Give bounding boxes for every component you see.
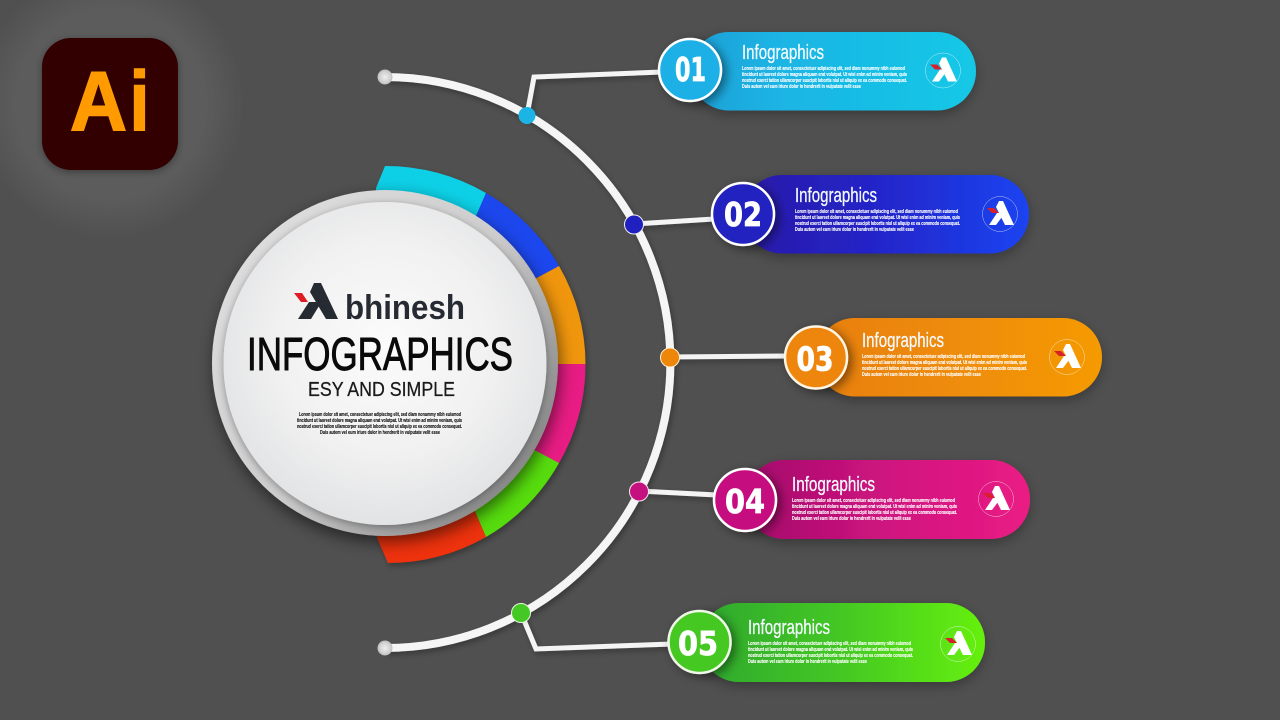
- heading: INFOGRAPHICS: [247, 328, 513, 380]
- icon: Adobe Illustrator logo: i: [130, 54, 150, 148]
- number badge: [659, 39, 721, 101]
- pill: [745, 460, 1030, 539]
- background glow behind logo: [0, 0, 245, 239]
- title: Infographics: [792, 474, 875, 496]
- body text: tincidunt ut laoreet dolore magna aliquam erat volutpat. Ut wisi enim ad minim veniam, quis: [792, 504, 957, 510]
- body text: Duis autem vel eum iriure dolor in hendrerit in vulputate velit esse: [742, 84, 861, 90]
- body text: Duis autem vel eum iriure dolor in hendrerit in vulputate velit esse: [862, 372, 981, 378]
- body text: Duis autem vel eum iriure dolor in hendrerit in vulputate velit esse: [792, 516, 911, 522]
- arc dot 5: [512, 604, 530, 622]
- body text: Duis autem vel eum iriure dolor in hendrerit in vulputate velit esse: [795, 227, 914, 233]
- center text block: Lorem ipsum dolor sit amet, consectetuer adipiscing elit, sed diam nonummy nibh euismod: [299, 412, 461, 418]
- pill: [743, 175, 1029, 254]
- body text: nostrud exerci tation ullamcorper suscipit lobortis nisl ut aliquip ex ea commodo consequat.: [862, 366, 1027, 372]
- logo icon: [1050, 340, 1084, 374]
- number: 05: [678, 624, 718, 663]
- large arc: [385, 77, 670, 648]
- body text: Lorem ipsum dolor sit amet, consectetuer adipiscing elit, sed diam nonummy nibh euismod: [795, 209, 958, 215]
- body text: Lorem ipsum dolor sit amet, consectetuer adipiscing elit, sed diam nonummy nibh euismod: [742, 66, 905, 72]
- pill: [700, 603, 985, 682]
- title: Infographics: [742, 42, 824, 64]
- body text: [792, 498, 957, 522]
- arc dot 4: [630, 482, 648, 501]
- subheading: ESY AND SIMPLE: [308, 379, 455, 401]
- title: Infographics: [862, 330, 944, 352]
- logo icon: [940, 626, 976, 662]
- card 01: [659, 32, 976, 110]
- center text block: nostrud exerci tation ullamcorper suscipit lobortis nisl ut aliquip ex ea commodo consequat.: [297, 424, 462, 430]
- arc dot 3: [660, 348, 680, 367]
- card 02: [712, 175, 1029, 254]
- number badge: [785, 326, 847, 388]
- ring segment: blue: [440, 193, 559, 330]
- body text: nostrud exerci tation ullamcorper suscipit lobortis nisl ut aliquip ex ea commodo consequat.: [742, 78, 907, 84]
- logo icon: [978, 482, 1014, 516]
- icon: Adobe Illustrator logo: [42, 38, 178, 170]
- brand logo: Abhinesh: [294, 283, 465, 327]
- number: 04: [725, 482, 765, 521]
- logo icon: [926, 53, 960, 88]
- colored segmented ring: [376, 166, 586, 563]
- center text block: tincidunt ut laoreet dolore magna aliquam erat volutpat. Ut wisi enim ad minim veniam, quis: [297, 418, 462, 424]
- arc end cap: top: [378, 70, 392, 84]
- ring segment: red: [377, 430, 486, 563]
- body text: [795, 209, 960, 233]
- body text: nostrud exerci tation ullamcorper suscipit lobortis nisl ut aliquip ex ea commodo consequat.: [795, 221, 960, 227]
- body text: Lorem ipsum dolor sit amet, consectetuer adipiscing elit, sed diam nonummy nibh euismod: [862, 354, 1025, 360]
- icon: Adobe Illustrator logo: A: [70, 54, 127, 148]
- pill: [816, 318, 1102, 396]
- body text: nostrud exerci tation ullamcorper suscipit lobortis nisl ut aliquip ex ea commodo consequat.: [792, 510, 957, 516]
- ring segment: cyan: [376, 166, 486, 300]
- brand logo: Abhinesh: bhinesh: [345, 289, 465, 327]
- connector lines: [521, 72, 787, 649]
- center text block: Duis autem vel eum iriure dolor in hendrerit in vulputate velit esse: [320, 430, 440, 436]
- body text: tincidunt ut laoreet dolore magna aliquam erat volutpat. Ut wisi enim ad minim veniam, quis: [742, 72, 907, 78]
- card 03: [785, 318, 1102, 396]
- body text: nostrud exerci tation ullamcorper suscipit lobortis nisl ut aliquip ex ea commodo consequat.: [748, 653, 913, 659]
- inner face: [224, 202, 546, 525]
- body text: [748, 641, 913, 665]
- body text: Lorem ipsum dolor sit amet, consectetuer adipiscing elit, sed diam nonummy nibh euismod: [748, 641, 911, 647]
- card 05: [668, 603, 985, 682]
- body text: tincidunt ut laoreet dolore magna aliquam erat volutpat. Ut wisi enim ad minim veniam, quis: [862, 360, 1027, 366]
- body text: tincidunt ut laoreet dolore magna aliquam erat volutpat. Ut wisi enim ad minim veniam, quis: [795, 215, 960, 221]
- ring segment: pink: [440, 364, 586, 463]
- outer rim: [212, 190, 558, 536]
- number badge: [712, 183, 774, 245]
- body text: [742, 66, 907, 90]
- body text: tincidunt ut laoreet dolore magna aliquam erat volutpat. Ut wisi enim ad minim veniam, quis: [748, 647, 913, 653]
- ring segment: orange: [440, 266, 586, 364]
- title: Infographics: [748, 617, 830, 639]
- arc dot 1: [518, 107, 536, 124]
- number: 01: [675, 50, 706, 89]
- center text block: [297, 412, 462, 436]
- number badge: [668, 611, 730, 673]
- body text: Lorem ipsum dolor sit amet, consectetuer adipiscing elit, sed diam nonummy nibh euismod: [792, 498, 955, 504]
- arc dot 2: [624, 215, 644, 234]
- pill: [690, 32, 976, 110]
- arc end cap: bottom: [378, 640, 392, 656]
- main circle: [212, 190, 558, 536]
- number: 03: [796, 340, 834, 378]
- title: Infographics: [795, 185, 877, 207]
- logo icon: [982, 196, 1018, 232]
- number badge: [714, 469, 776, 531]
- card 04: [714, 460, 1030, 539]
- number: 02: [724, 195, 762, 234]
- body text: Duis autem vel eum iriure dolor in hendrerit in vulputate velit esse: [748, 659, 867, 665]
- body text: [862, 354, 1027, 378]
- ring segment: green: [440, 400, 559, 537]
